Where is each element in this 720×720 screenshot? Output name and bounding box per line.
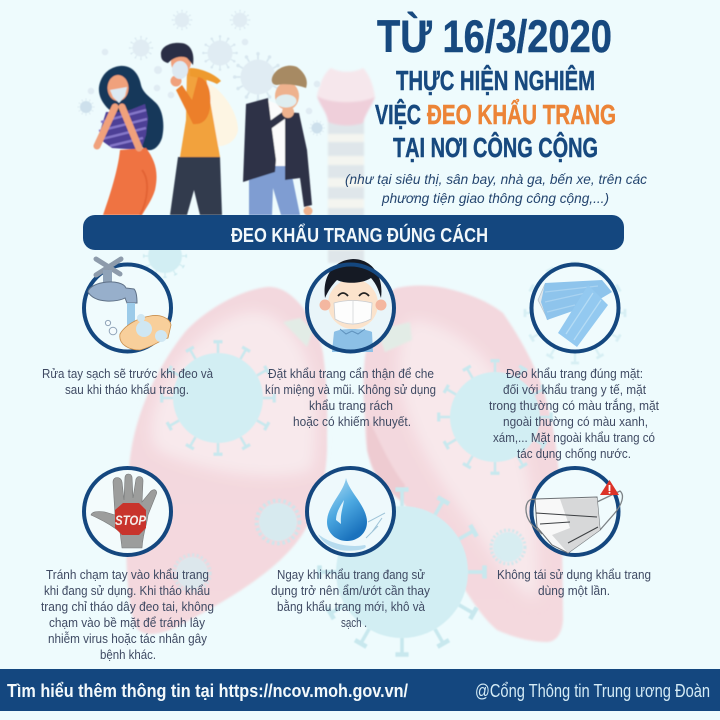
icon: boy with mask [307,259,394,352]
text: wearing mask: hoặc có khiếm khuyết. [293,414,411,429]
subtitle [345,172,647,206]
title [375,11,616,163]
icon: water drop [307,468,394,555]
text: wet mask: Ngay khi khẩu trang đang sử [277,567,425,582]
icon: stop hand [84,468,171,555]
right lung shadow [367,420,405,502]
man with orange jacket [161,43,238,215]
panel: correct side [489,264,659,461]
panel: do not reuse [497,468,651,598]
title line 2: THỰC HIỆN NGHIÊM [396,65,595,96]
text: hand washing: sau khi tháo khẩu trang. [65,382,189,397]
text: hand washing [42,366,214,397]
text: wet mask: sạch . [341,615,367,630]
text: do not touch [41,567,214,662]
panel: wet mask [271,468,430,630]
icon: blue surgical masks [532,264,618,352]
panel: wearing mask [265,259,436,429]
panel: hand washing [42,259,214,397]
woman with mask [97,66,163,215]
text: correct side: xám,... Mặt ngoài khẩu trang có [493,430,655,445]
text: do not reuse: Không tái sử dụng khẩu trang [497,567,651,582]
text: correct side: tác dụng chống nước. [517,446,631,461]
title highlight: ĐEO KHẨU TRANG [427,99,616,130]
lungs illustration [126,286,563,642]
text: wet mask [271,567,430,630]
text: do not reuse: dùng một lần. [538,583,610,598]
text: correct side: ngoài thường có màu xanh, [503,414,648,429]
text: wearing mask: Đặt khẩu trang cẩn thận để che [268,366,434,381]
text: correct side: Đeo khẩu trang đúng mặt: [506,366,643,381]
footer bar [0,669,720,711]
text: correct side [489,366,659,461]
text: hand washing: Rửa tay sạch sẽ trước khi đeo và [42,366,214,381]
subtitle: phương tiện giao thông công cộng,...) [381,191,609,206]
text: correct side: đối với khẩu trang y tế, mặt [503,382,646,397]
icon: used mask with warning [526,468,622,555]
panel: do not touch [41,468,214,662]
text: wet mask: dụng trở nên ẩm/ướt cần thay [271,583,430,598]
banner heading: ĐEO KHẨU TRANG ĐÚNG CÁCH [231,223,488,247]
title date: TỪ 16/3/2020 [377,11,612,62]
text: wearing mask: khẩu trang rách [309,398,393,413]
text: do not touch: chạm vào bề mặt để tránh lây [49,615,205,630]
icon: stop hand: STOP [115,512,147,528]
text: do not touch: trang chỉ tháo dây đeo tai, không [41,599,214,614]
man with dark jacket [243,66,312,216]
text: wearing mask [265,366,436,429]
text: do not touch: Tránh chạm tay vào khẩu trang [46,567,209,582]
title line 3: VIỆC [375,99,421,130]
text: do not touch: nhiễm virus hoặc tác nhân gây [48,631,207,646]
left lung upper lobe highlight [151,312,316,476]
text: do not reuse [497,567,651,598]
subtitle: (như tại siêu thị, sân bay, nhà ga, bến xe, trên các [345,172,647,187]
bronchi [283,318,313,347]
text: do not touch: bệnh khác. [100,647,156,662]
title line 4: TẠI NƠI CÔNG CỘNG [393,131,598,163]
icon: tap and hands [84,259,171,352]
banner heading [83,215,624,250]
footer link text: Tìm hiểu thêm thông tin tại https://ncov.moh.gov.vn/ [7,681,408,701]
right lung [364,286,563,642]
text: wearing mask: kín miệng và mũi. Không sử dụng [265,382,436,397]
people illustration [97,43,312,215]
header viruses [78,10,324,135]
left lung [126,287,327,634]
trachea illustration [317,68,375,263]
right lung highlight [399,320,538,600]
text: correct side: trong thường có màu trắng, mặt [489,398,659,413]
text: do not touch: khi đang sử dụng. Khi tháo khẩu [44,583,210,598]
background viruses [144,235,625,654]
text: wet mask: bằng khẩu trang mới, khô và [277,599,426,614]
